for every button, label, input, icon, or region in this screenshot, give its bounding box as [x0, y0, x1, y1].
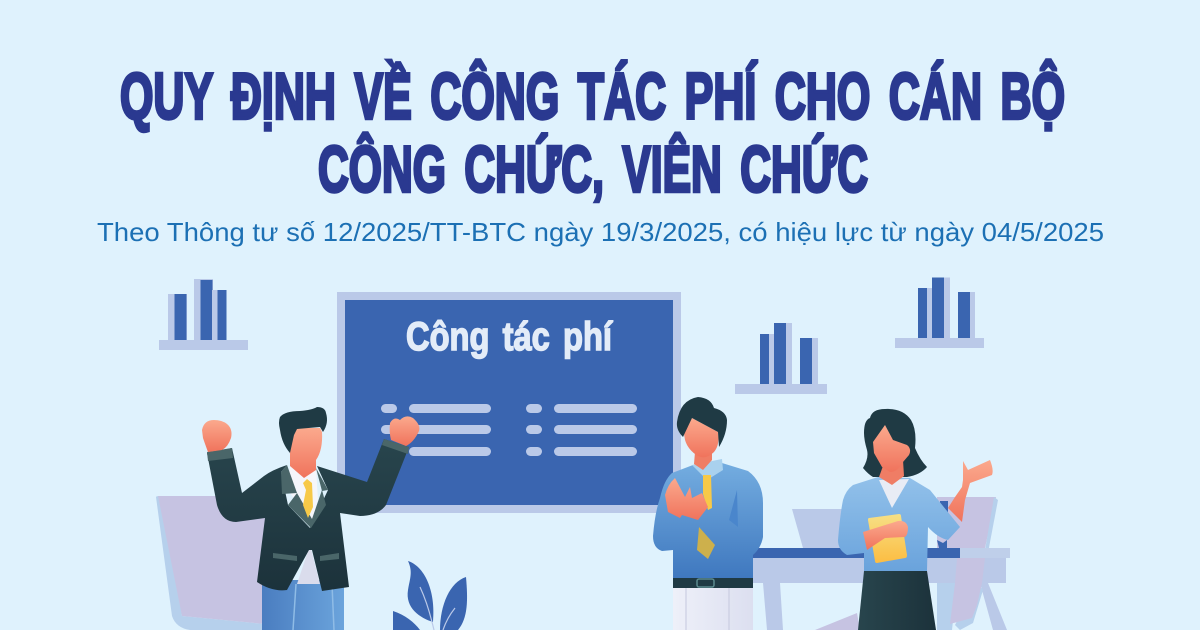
- right desk and chair: [753, 497, 1010, 630]
- woman with tablet: [838, 409, 993, 630]
- icon: middle bookshelf: [735, 323, 827, 394]
- blouse: [838, 477, 960, 571]
- desk body: [753, 558, 1006, 583]
- shirt hem: [297, 545, 320, 584]
- shirt collar: [692, 459, 723, 480]
- face: [873, 425, 910, 472]
- belt: [673, 578, 753, 588]
- trousers: [673, 588, 753, 630]
- laptop: [792, 509, 850, 548]
- necktie: [697, 475, 715, 559]
- board heading: Công tác phí: [406, 315, 614, 359]
- board list lines: [381, 404, 637, 456]
- board: [337, 292, 681, 513]
- man with raised fists: [202, 407, 419, 630]
- hair: [677, 397, 727, 447]
- neck: [879, 460, 904, 485]
- trousers: [262, 580, 344, 630]
- right fist: [390, 416, 419, 446]
- tablet: [868, 514, 907, 563]
- title line 2: CÔNG CHỨC, VIÊN CHỨC: [318, 132, 868, 205]
- forearm: [863, 521, 908, 550]
- left fist: [202, 420, 232, 452]
- shirt: [288, 465, 318, 520]
- chair back: [937, 497, 996, 548]
- icon: left bookshelf: [159, 279, 248, 350]
- raised arm: [948, 460, 993, 522]
- head: [683, 418, 718, 457]
- hair: [279, 407, 327, 453]
- jacket lapels and pockets: [207, 439, 409, 561]
- chair seat: [815, 558, 985, 630]
- sweater shade: [729, 490, 738, 527]
- skirt: [858, 571, 936, 630]
- stapler: [937, 501, 948, 548]
- sweater: [653, 463, 763, 578]
- title: [120, 59, 1065, 205]
- blouse neckline: [879, 479, 909, 508]
- hair: [863, 409, 927, 477]
- necktie: [303, 479, 313, 518]
- man clapping: [653, 397, 763, 630]
- chair support: [937, 583, 983, 630]
- jacket: [207, 439, 409, 591]
- subtitle: Theo Thông tư số 12/2025/TT-BTC ngày 19/3/2025, có hiệu lực từ ngày 04/5/2025: [97, 217, 1104, 247]
- clapping hands: [665, 478, 708, 520]
- head: [289, 428, 322, 478]
- icon: plant leaves: [393, 561, 467, 630]
- desk legs: [763, 583, 1007, 630]
- left chair: [156, 496, 265, 630]
- icon: right bookshelf: [895, 278, 984, 348]
- neck: [694, 450, 712, 470]
- desk top: [753, 548, 960, 558]
